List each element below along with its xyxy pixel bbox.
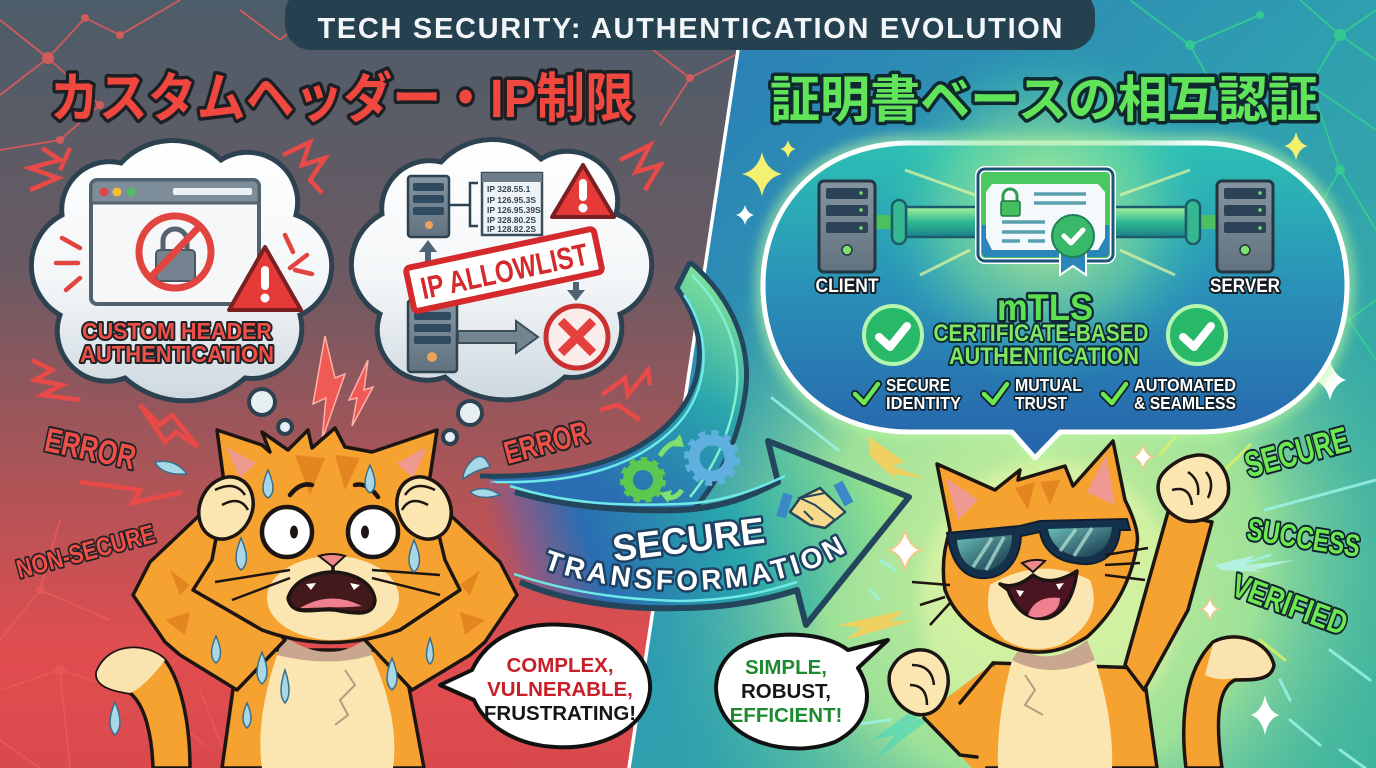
network pattern: left — [0, 0, 735, 768]
zigzag alert marks — [30, 142, 660, 503]
cat raised arm — [1125, 455, 1229, 690]
glow streaks and sparkles right — [736, 132, 1376, 768]
list: ip addresses — [482, 173, 542, 235]
icon: handshake — [781, 483, 849, 528]
list: ip addresses: IP 126.95.39S — [487, 205, 541, 215]
text: custom header authentication: AUTHENTICATION — [80, 341, 274, 367]
arrow: blocked request — [458, 321, 538, 353]
cat sunglasses — [947, 519, 1130, 578]
divider line — [629, 50, 738, 768]
benefit: mutual trust: TRUST — [1015, 393, 1067, 413]
cat tail — [97, 648, 190, 768]
cat head — [193, 428, 460, 642]
benefit: secure identity: SECURE — [886, 375, 950, 395]
panel: cloud ip allowlist — [351, 139, 652, 400]
icon: crossed padlock — [139, 216, 211, 288]
cat eyes — [262, 507, 398, 557]
transformation arrow: curved band — [480, 262, 747, 510]
sweat drops — [110, 456, 500, 735]
background: left grey-red half — [0, 0, 745, 768]
label: error left: ERROR — [41, 421, 139, 477]
icon: server server — [1217, 181, 1273, 272]
cat body — [977, 640, 1157, 768]
cat mouth and nose — [288, 554, 375, 613]
cat tail — [1184, 637, 1274, 768]
cat left arm — [133, 510, 285, 690]
title banner: TECH SECURITY: AUTHENTICATION EVOLUTION — [318, 13, 1062, 45]
cat body — [222, 636, 424, 768]
speech bubble: complex vulnerable frustrating — [440, 625, 650, 747]
text: custom header authentication — [80, 318, 274, 367]
speech bubble: simple robust efficient: EFFICIENT! — [730, 704, 842, 727]
label: client: CLIENT — [816, 276, 879, 297]
cat hands — [189, 468, 461, 548]
background: right blue-green half — [600, 0, 1376, 768]
cat whiskers — [912, 548, 1148, 625]
heading: certificate based mutual authentication: 証明書ベースの相互認証 — [770, 72, 1318, 128]
arrow label: secure: SECURE — [610, 510, 767, 569]
cat head — [937, 441, 1138, 652]
label: server: SERVER — [1210, 276, 1280, 297]
cat whiskers — [215, 570, 440, 600]
list: ip addresses: IP 128.82.2S — [487, 224, 536, 234]
list: ip addresses: IP 328.55.1 — [487, 184, 531, 194]
speech bubble: simple robust efficient — [716, 635, 888, 748]
speech bubble: simple robust efficient: ROBUST, — [741, 680, 831, 703]
list: ip addresses: IP 126.95.3S — [487, 195, 536, 205]
icon: warning triangle — [229, 247, 301, 310]
icon: check left — [864, 306, 922, 364]
list: ip addresses: IP 328.80.2S — [487, 215, 536, 225]
icon: certificate — [978, 169, 1113, 275]
speech bubble: simple robust efficient: SIMPLE, — [745, 656, 827, 679]
network pattern: right — [1130, 0, 1376, 360]
cat right arm — [365, 510, 517, 690]
icon: browser window — [91, 180, 259, 304]
character: worried cat — [97, 428, 517, 768]
icon: check right — [1168, 306, 1226, 364]
panel: cloud custom header — [31, 140, 332, 401]
bubble glow halo — [763, 143, 1347, 458]
subheading: certificate-based authentication — [934, 320, 1148, 370]
thought bubbles — [249, 389, 482, 444]
pipe connection — [876, 200, 1216, 244]
benefit: automated and seamless — [1103, 375, 1236, 413]
benefit: secure identity — [855, 375, 961, 413]
icon: gears — [623, 433, 737, 503]
speech bubble: complex vulnerable frustrating: COMPLEX, — [506, 654, 614, 677]
label: error right: ERROR — [500, 414, 592, 471]
benefit: automated and seamless: & SEAMLESS — [1134, 393, 1236, 413]
icon: warning triangle — [552, 165, 614, 217]
subheading: certificate-based authentication: AUTHENTICATION — [949, 343, 1139, 370]
icon: server top — [408, 176, 449, 237]
stamp: ip allowlist: IP ALLOWLIST — [418, 237, 591, 306]
speech bubble: complex vulnerable frustrating: FRUSTRATING! — [484, 702, 636, 725]
character: happy cat with sunglasses — [889, 441, 1274, 768]
icon: server bottom — [408, 300, 457, 372]
speech bubble: complex vulnerable frustrating: VULNERABLE, — [487, 678, 633, 701]
benefit: secure identity: IDENTITY — [886, 393, 961, 413]
arrow label: transformation: TRANSFORMATION — [546, 534, 848, 593]
benefit: mutual trust — [984, 375, 1082, 413]
icon: red x — [546, 306, 608, 368]
lightning decoration — [868, 436, 925, 486]
cat lowered arm — [889, 650, 1000, 768]
cat nose and mouth — [1000, 560, 1077, 618]
heading: mtls: mTLS — [997, 287, 1093, 328]
panel: mtls speech bubble — [763, 45, 1347, 458]
label: non-secure: NON-SECURE — [13, 518, 158, 584]
text: custom header authentication: CUSTOM HEADER — [82, 318, 272, 344]
transformation arrow: main — [485, 438, 912, 628]
subheading: certificate-based authentication: CERTIFICATE-BASED — [934, 320, 1148, 347]
icon: client server — [819, 181, 875, 272]
lightning bolts — [313, 336, 373, 440]
benefit: mutual trust: MUTUAL — [1015, 375, 1082, 395]
title banner — [285, 0, 1095, 50]
benefit: automated and seamless: AUTOMATED — [1134, 375, 1236, 395]
heading: custom header and ip restriction: カスタムヘッダー・IP制限 — [50, 69, 634, 129]
